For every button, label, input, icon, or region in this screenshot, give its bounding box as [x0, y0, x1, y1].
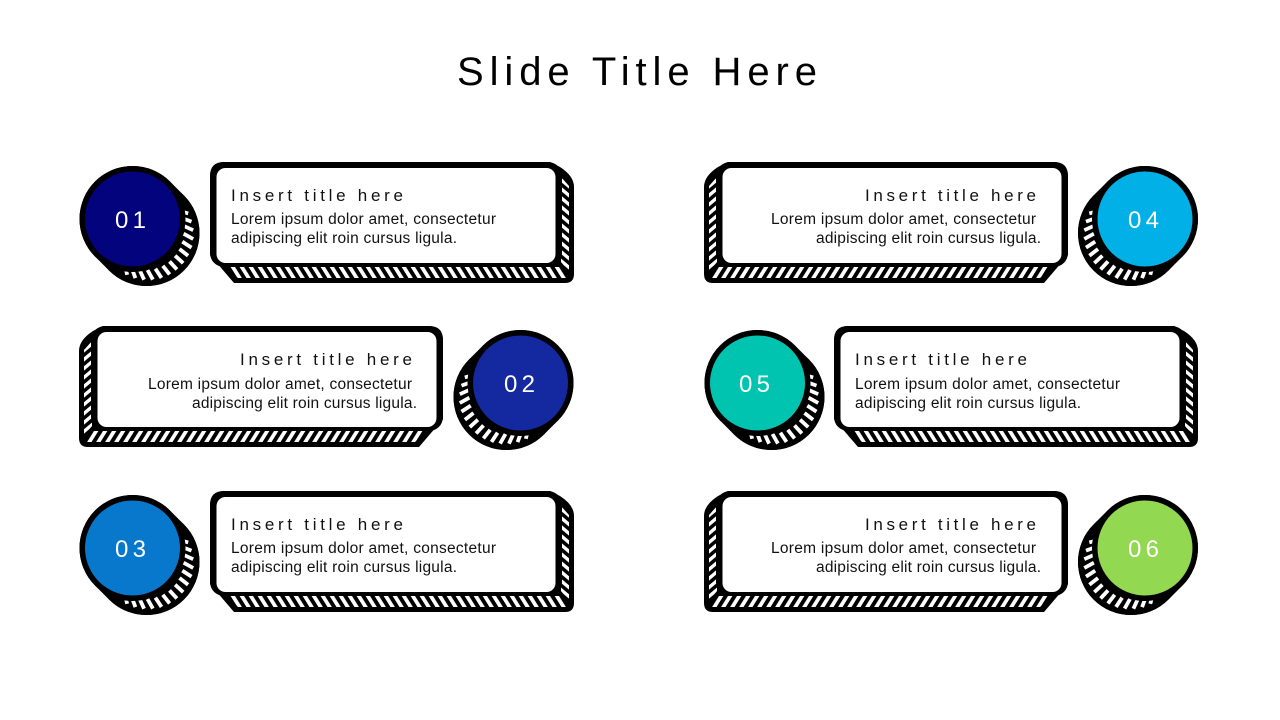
- badge 03: [80, 495, 200, 615]
- panel 06: Lorem ipsum dolor amet, consectetur: [771, 540, 1036, 557]
- panel 05: [834, 326, 1198, 447]
- badge 04: [1078, 166, 1198, 286]
- item 02: [79, 326, 574, 450]
- panel 02: [79, 326, 443, 447]
- badge 06: 06: [1128, 536, 1159, 563]
- item 03: [80, 491, 574, 615]
- panel 01: [210, 162, 574, 283]
- panel 03: [210, 491, 574, 612]
- panel 06: adipiscing elit roin cursus ligula.: [816, 559, 1041, 576]
- badge 03: 03: [115, 536, 146, 563]
- panel 05: Lorem ipsum dolor amet, consectetur: [855, 376, 1120, 393]
- badge 06: [1078, 495, 1198, 615]
- badge 01: [80, 166, 200, 286]
- badge 05: 05: [739, 371, 770, 398]
- badge 02: 02: [504, 371, 535, 398]
- panel 04: Insert title here: [865, 186, 1036, 205]
- panel 02: adipiscing elit roin cursus ligula.: [192, 395, 417, 412]
- item 01: [80, 162, 574, 286]
- panel 04: [704, 162, 1068, 283]
- panel 03: adipiscing elit roin cursus ligula.: [231, 559, 457, 576]
- panel 02: Lorem ipsum dolor amet, consectetur: [148, 376, 412, 393]
- title: Slide Title Here: [457, 50, 817, 94]
- panel 02: Insert title here: [240, 350, 412, 369]
- badge 02: [454, 330, 574, 450]
- item 06: [704, 491, 1198, 615]
- panel 06: [704, 491, 1068, 612]
- item 04: [704, 162, 1198, 286]
- panel 01: adipiscing elit roin cursus ligula.: [231, 230, 457, 247]
- panel 05: Insert title here: [855, 350, 1027, 369]
- badge 05: [704, 330, 824, 450]
- panel 04: adipiscing elit roin cursus ligula.: [816, 230, 1041, 247]
- panel 06: Insert title here: [865, 515, 1036, 534]
- panel 01: Lorem ipsum dolor amet, consectetur: [231, 211, 496, 228]
- panel 05: adipiscing elit roin cursus ligula.: [855, 395, 1081, 412]
- badge 01: 01: [115, 207, 146, 234]
- item 05: [704, 326, 1198, 450]
- panel 04: Lorem ipsum dolor amet, consectetur: [771, 211, 1036, 228]
- panel 03: Insert title here: [231, 515, 403, 534]
- panel 03: Lorem ipsum dolor amet, consectetur: [231, 540, 496, 557]
- badge 04: 04: [1128, 207, 1159, 234]
- panel 01: Insert title here: [231, 186, 403, 205]
